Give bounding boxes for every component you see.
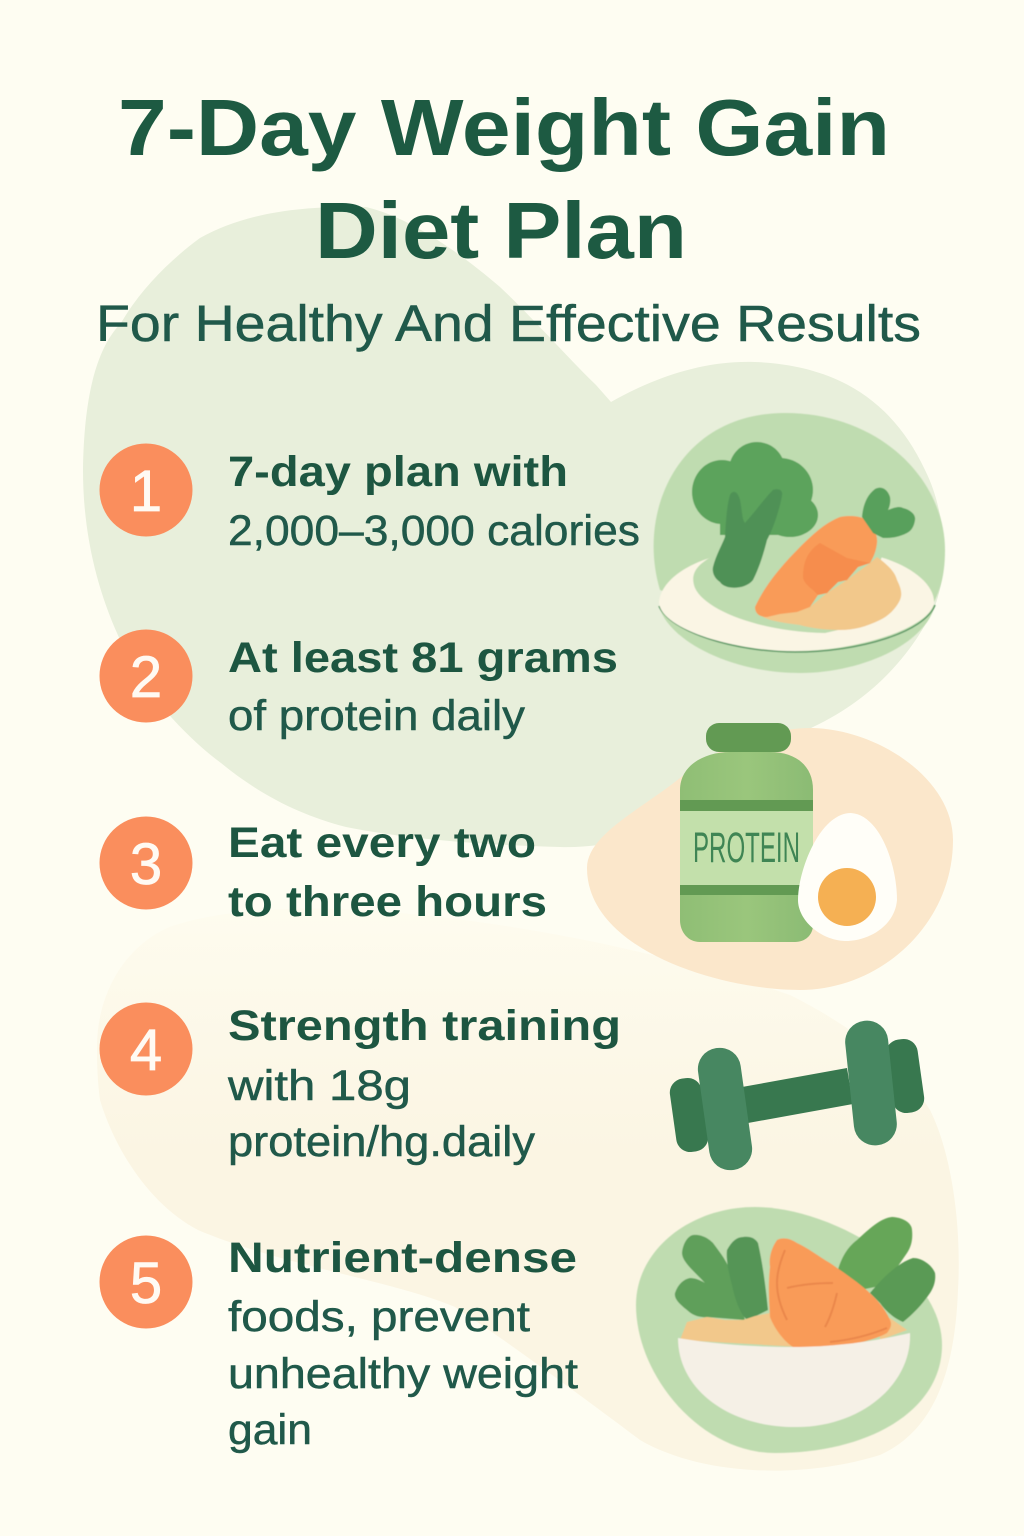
icon: salad bowl xyxy=(636,1207,942,1453)
item 5 xyxy=(100,1234,578,1454)
plate well xyxy=(693,529,882,633)
number badge 2 xyxy=(100,630,192,722)
item 4 text: Strength training xyxy=(228,1002,621,1050)
item 1 text xyxy=(228,448,640,555)
carrot xyxy=(755,516,877,617)
rice xyxy=(680,1313,907,1347)
right leaves xyxy=(838,1217,912,1290)
item 1 text: 2,000–3,000 calories xyxy=(228,507,640,555)
broccoli stem xyxy=(713,489,782,588)
icon: plate with broccoli and carrot xyxy=(654,413,945,673)
icon: dumbbell xyxy=(668,1019,926,1173)
jar label: PROTEIN xyxy=(693,824,800,872)
left leaves xyxy=(675,1235,745,1320)
item 1 xyxy=(100,444,640,555)
jar lid xyxy=(706,723,791,752)
number badge 1: 1 xyxy=(130,459,162,524)
icon: protein jar and egg xyxy=(680,723,897,942)
item 5 text: gain xyxy=(228,1406,312,1454)
background blob: cream xyxy=(97,909,959,1471)
broccoli crown xyxy=(692,442,818,537)
item 3 text: Eat every two xyxy=(228,819,536,867)
number badge 4 xyxy=(100,1002,192,1096)
background blob: green xyxy=(83,207,944,847)
number badge 1 xyxy=(100,444,192,536)
bowl xyxy=(678,1333,910,1427)
item 5 text: unhealthy weight xyxy=(228,1350,578,1398)
background blob: peach xyxy=(587,728,953,990)
orange slice xyxy=(769,1238,891,1347)
subtitle: For Healthy And Effective Results xyxy=(96,295,921,352)
item 4 text: protein/hg.daily xyxy=(228,1118,536,1166)
number badge 5 xyxy=(100,1236,192,1328)
number badge 3: 3 xyxy=(130,832,162,897)
jar body xyxy=(680,752,813,942)
item 3 xyxy=(100,816,547,926)
icon: egg xyxy=(798,813,897,941)
number badge 2: 2 xyxy=(130,645,162,710)
item 2 text xyxy=(228,634,618,740)
number badge 5: 5 xyxy=(130,1251,162,1316)
item 2 text: At least 81 grams xyxy=(228,634,618,682)
rice xyxy=(763,557,901,630)
item 2 xyxy=(100,630,618,740)
plate rim xyxy=(659,557,934,651)
item 4 text xyxy=(227,1002,621,1166)
carrot leaves xyxy=(862,488,915,538)
title: 7-Day Weight Gain xyxy=(118,83,890,172)
title xyxy=(118,83,890,275)
item 4 xyxy=(100,1002,621,1166)
item 5 text: Nutrient-dense xyxy=(228,1234,577,1282)
item 3 text xyxy=(228,819,547,926)
title: Diet Plan xyxy=(315,186,687,275)
item 5 text xyxy=(228,1234,578,1454)
item 1 text: 7-day plan with xyxy=(228,448,568,496)
item 4 text: with 18g xyxy=(227,1062,411,1110)
number badge 3 xyxy=(100,816,192,910)
item 2 text: of protein daily xyxy=(228,692,526,740)
item 5 text: foods, prevent xyxy=(228,1293,530,1341)
item 3 text: to three hours xyxy=(228,878,547,926)
number badge 4: 4 xyxy=(130,1018,162,1083)
